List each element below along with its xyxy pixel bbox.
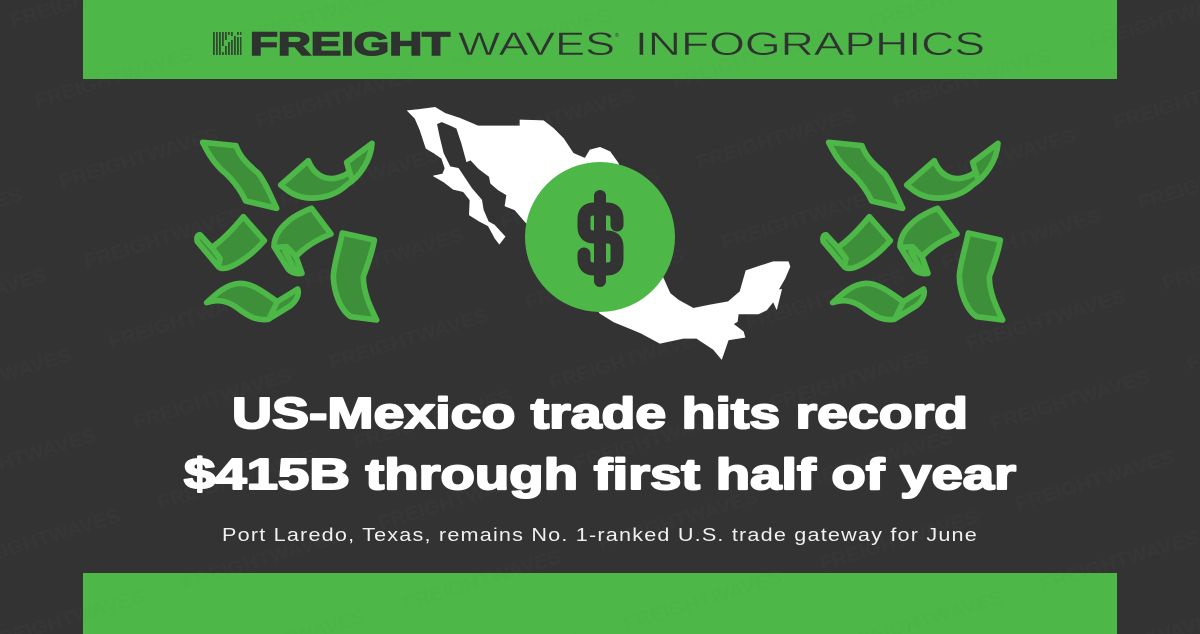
logo wordmark: INFOGRAPHICS (635, 26, 985, 62)
title: US-Mexico trade hits record (232, 389, 968, 438)
icon: map of Mexico with dollar coin (407, 107, 790, 359)
subtitle: Port Laredo, Texas, remains No. 1-ranked U.S. trade gateway for June (222, 525, 978, 545)
icon: falling money left (197, 142, 377, 320)
icon: FreightWaves logo mark (213, 32, 242, 55)
title (184, 389, 1016, 499)
title: $415B through first half of year (184, 450, 1016, 499)
logo wordmark: ® (615, 32, 619, 39)
icon: dollar sign (584, 196, 617, 281)
top green banner (83, 0, 1117, 79)
logo wordmark: FREIGHT (250, 26, 451, 62)
logo wordmark (250, 26, 985, 62)
dollar coin (525, 162, 675, 312)
logo wordmark: WAVES (458, 26, 615, 62)
icon: falling money right (823, 142, 1003, 320)
map of Mexico (407, 107, 790, 359)
bottom green banner (83, 573, 1117, 634)
